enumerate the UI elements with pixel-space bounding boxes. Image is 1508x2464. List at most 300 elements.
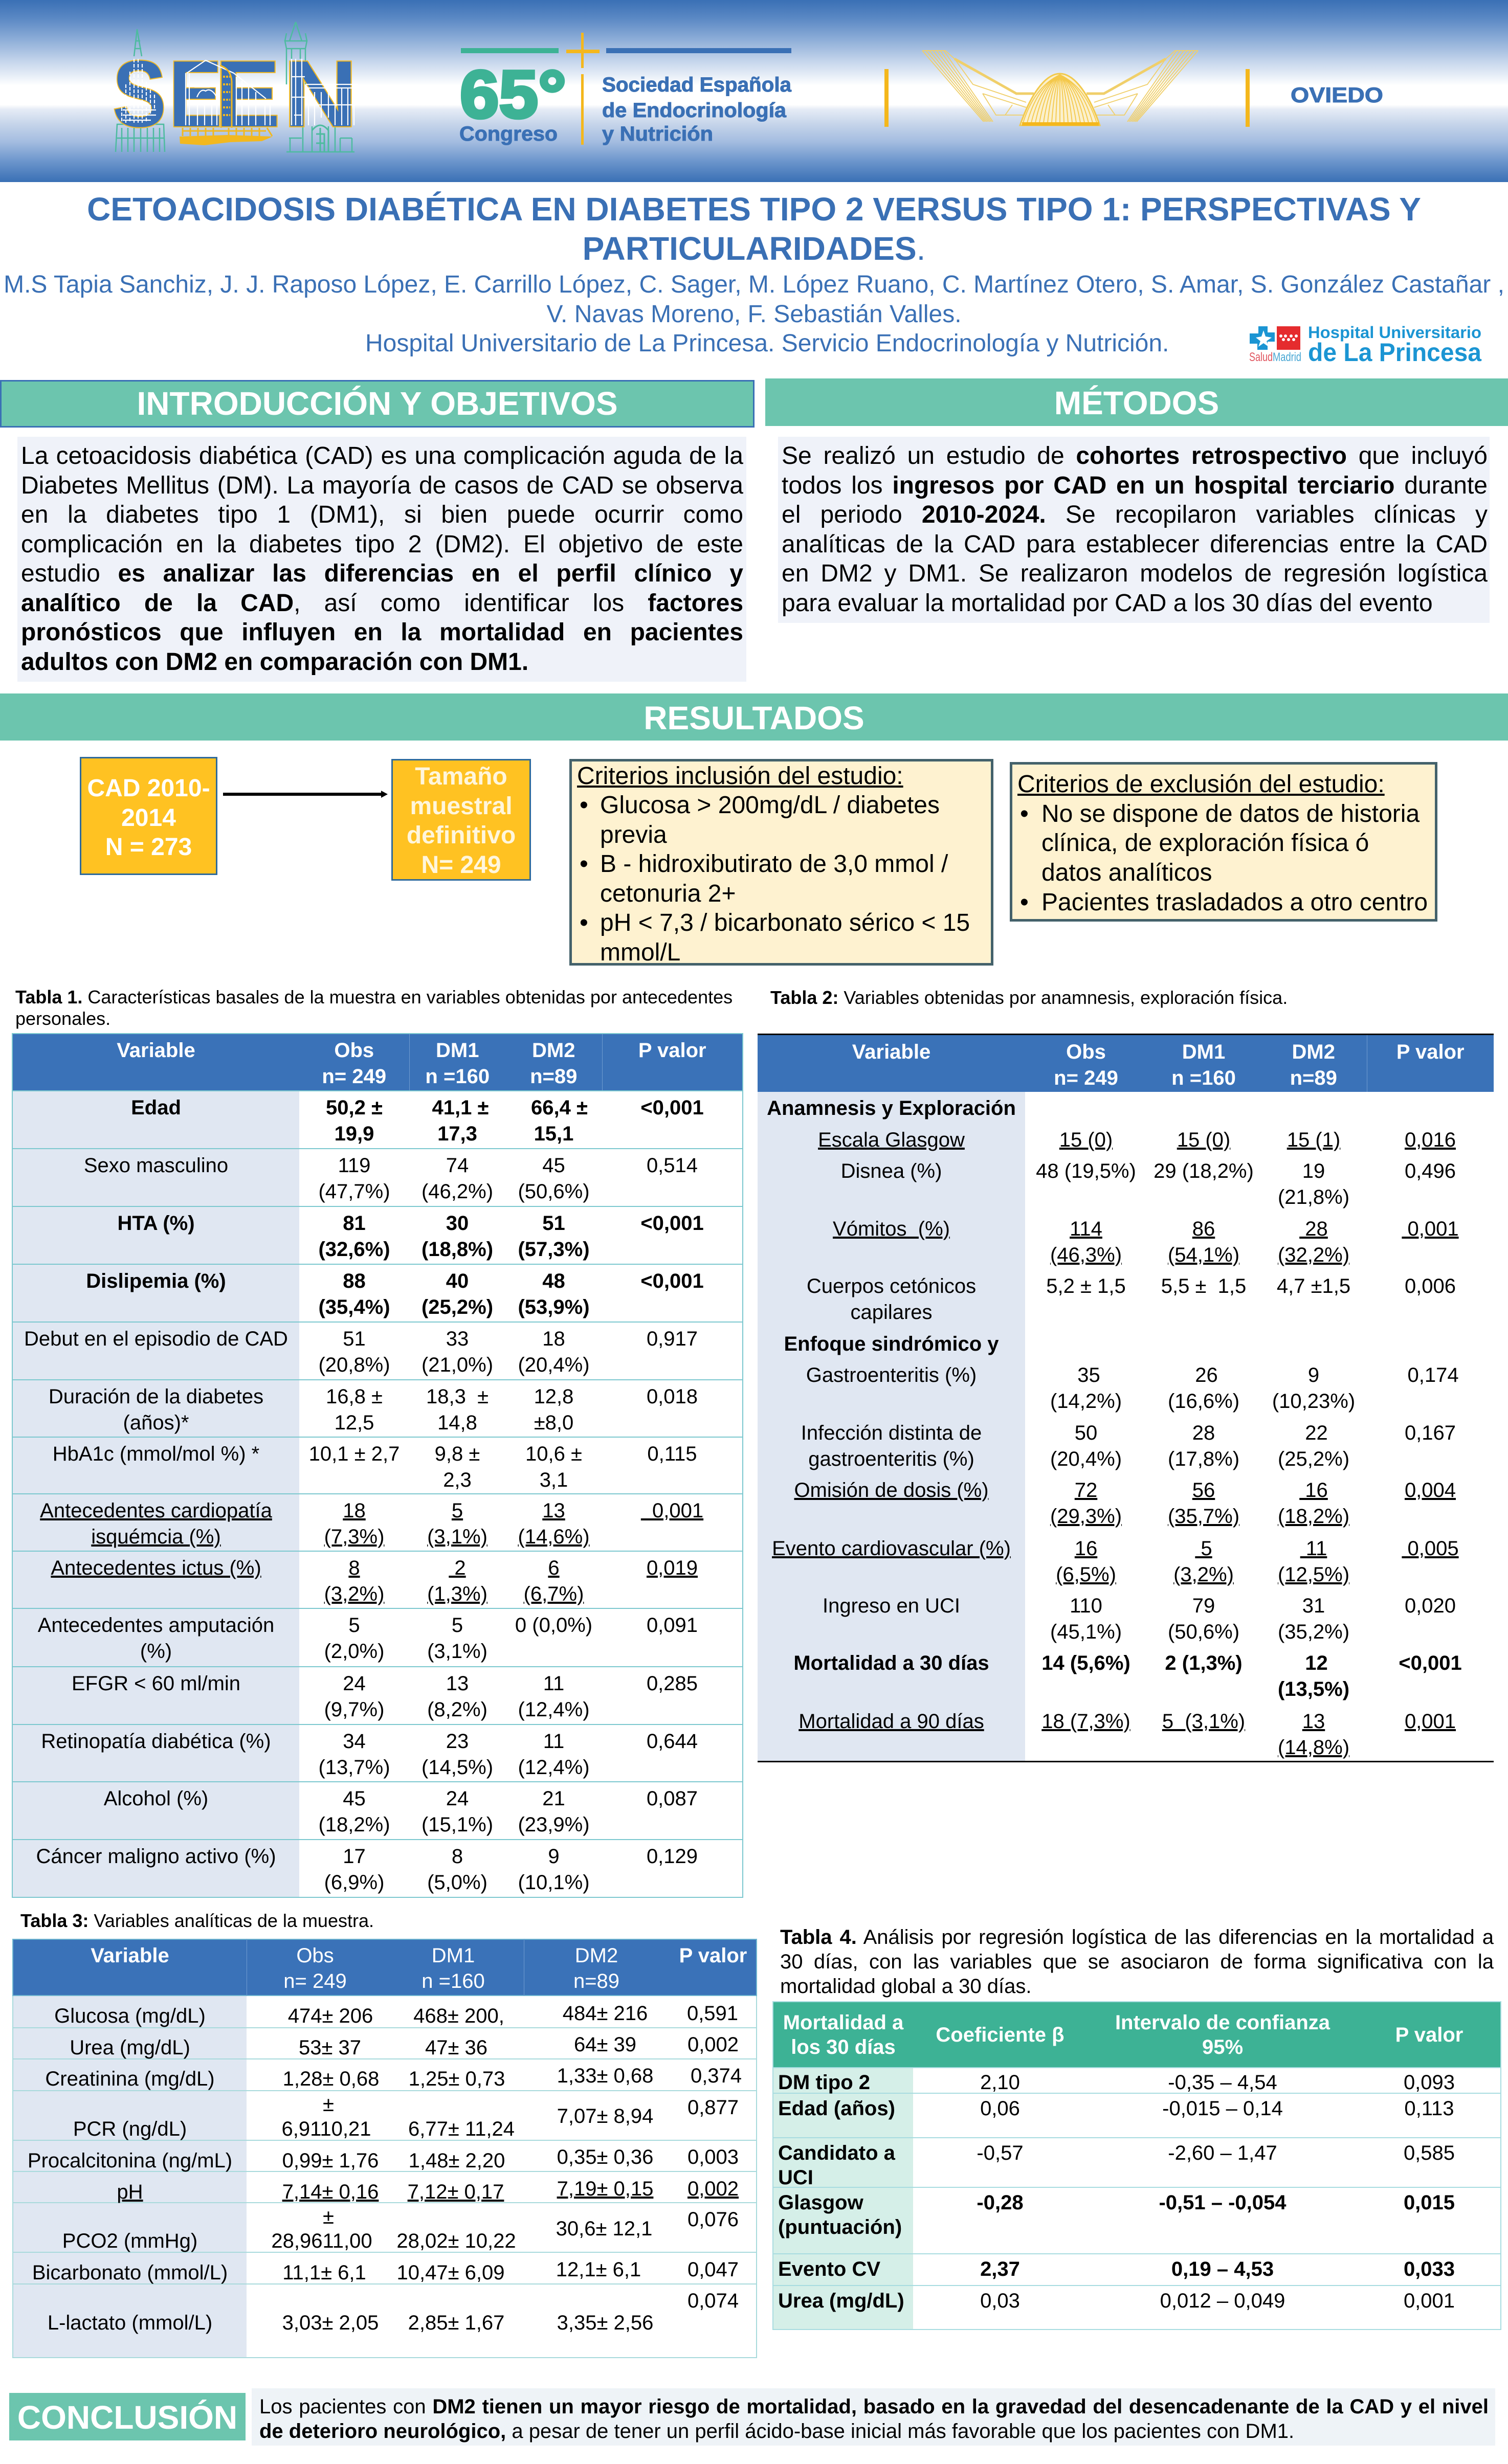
table 2: 19 [1302, 1160, 1325, 1182]
caption: tabla 4: 30 días, con las variables que se asociaron de forma significativa con la [780, 1951, 1494, 1973]
panel: introducción text: pronósticos que influyen en la mortalidad en pacientes [21, 619, 743, 646]
table 4: los 30 días [791, 2035, 896, 2058]
table 1: 5 [452, 1614, 463, 1637]
table 1: 88 [343, 1270, 366, 1292]
table 1: 11 [543, 1730, 564, 1753]
logo: Oviedo monument [922, 51, 1198, 126]
exclusion list [1020, 800, 1428, 916]
table 3: 0,35± 0,36 [557, 2146, 653, 2168]
table 1: 34 [343, 1730, 366, 1753]
table 1: 45 [343, 1787, 366, 1810]
table 2: 4,7 ±1,5 [1277, 1274, 1350, 1297]
table 3: ± [323, 2093, 334, 2116]
table 1: 16,8 ± [326, 1385, 383, 1408]
table 3: 7,12± 0,17 [408, 2181, 504, 2203]
header banner [0, 0, 1508, 182]
table 2: 31 [1302, 1595, 1325, 1617]
table 4: -0,57 [977, 2142, 1024, 2164]
table 2: (45,1%) [1050, 1620, 1122, 1643]
table 3: 1,33± 0,68 [557, 2065, 653, 2087]
table 2: 28 [1192, 1422, 1215, 1444]
table 2: 15 (1) [1287, 1128, 1340, 1151]
table 1: 30 [446, 1212, 469, 1235]
table 4: 0,06 [980, 2097, 1020, 2120]
table 2: n=89 [1290, 1067, 1337, 1089]
logo: Hospital de La Princesa: Salud [1249, 350, 1273, 364]
inclusion list: Glucosa > 200mg/dL / diabetes [600, 792, 940, 819]
table 2: 5,2 ± 1,5 [1046, 1274, 1126, 1297]
table 1: 0,091 [647, 1614, 698, 1637]
table 4: 0,03 [980, 2290, 1020, 2312]
exclusion list: • [1020, 800, 1029, 827]
inclusion list: • [580, 792, 588, 819]
table 2: 26 [1195, 1363, 1218, 1386]
caption: tabla 1: Tabla 1. Características basales de la muestra en variables obtenidas por antecedentes [15, 987, 733, 1007]
table 2: 50 [1075, 1422, 1097, 1444]
table 1: (3,1%) [427, 1640, 487, 1663]
table 3: 47± 36 [425, 2036, 487, 2059]
table 2: 0,167 [1405, 1422, 1456, 1444]
caption: tabla 4: Tabla 4. Análisis por regresión logística de las diferencias en la mortalidad a [780, 1926, 1494, 1948]
panel: métodos text: analíticas de la CAD para establecer diferencias entre la CAD [782, 531, 1488, 557]
table 1: EFGR < 60 ml/min [72, 1672, 240, 1695]
table 1: (%) [140, 1640, 172, 1663]
table 1: HbA1c (mmol/mol %) * [53, 1443, 259, 1465]
inclusion list: • [580, 909, 588, 936]
table 1: 40 [446, 1270, 469, 1292]
table 4: Mortalidad a [783, 2011, 903, 2033]
logo: 65 congreso: Congreso [459, 123, 558, 145]
table 1: 5 [348, 1614, 360, 1637]
authors [4, 271, 1504, 328]
table 1: DM2 [532, 1039, 575, 1062]
table 1: 0,285 [647, 1672, 698, 1695]
table 1: n =160 [425, 1065, 490, 1088]
caption: tabla 3: Tabla 3: Variables analíticas de la muestra. [20, 1910, 374, 1931]
table 1: 0,115 [647, 1443, 697, 1465]
table 4: 0,015 [1404, 2191, 1455, 2214]
table 1: DM1 [436, 1039, 479, 1062]
table 1: 81 [343, 1212, 366, 1235]
table 1: 3,1 [540, 1469, 568, 1491]
panel: métodos text: para evaluar la mortalidad por CAD a los 30 días del evento [782, 589, 1433, 617]
table 3: Creatinina (mg/dL) [45, 2068, 215, 2090]
table 2: Cuerpos cetónicos [807, 1274, 976, 1297]
table 1: 18,3 ± [426, 1385, 489, 1408]
table 4: 0,113 [1404, 2097, 1454, 2120]
table 4: Evento CV [778, 2258, 880, 2280]
table 1: (53,9%) [518, 1296, 590, 1318]
table 2: (25,2%) [1278, 1447, 1349, 1470]
table 2: n= 249 [1054, 1067, 1118, 1089]
table 3: Bicarbonato (mmol/L) [32, 2261, 228, 2284]
table 4: Intervalo de confianza [1115, 2011, 1330, 2033]
table 1: Cáncer maligno activo (%) [36, 1845, 276, 1868]
flow box: CAD 2010-2014: CAD 2010- [87, 775, 210, 802]
table 1: 19,9 [335, 1123, 374, 1145]
table 1: 5 [452, 1499, 463, 1522]
arrow: flow to final sample [223, 791, 388, 798]
table 2: Disnea (%) [841, 1160, 942, 1182]
logo: Oviedo text: OVIEDO [1291, 83, 1383, 107]
table 1: 0,019 [647, 1557, 698, 1579]
table 2: 5 (3,1%) [1162, 1710, 1245, 1733]
table 3: n=89 [573, 1970, 619, 1992]
panel: métodos text: Se realizó un estudio de cohortes retrospectivo que incluyó [782, 442, 1488, 469]
table 1: 41,1 ± [432, 1096, 489, 1119]
table 2: Ingreso en UCI [823, 1595, 960, 1617]
table 2: Gastroenteritis (%) [806, 1363, 977, 1386]
table 1: 18 [343, 1499, 366, 1522]
panel: métodos text: todos los ingresos por CAD en un hospital terciario durante [782, 472, 1488, 499]
table 1: 0 (0,0%) [515, 1614, 592, 1637]
table 1: 0,087 [647, 1787, 698, 1810]
table 1: (25,2%) [422, 1296, 493, 1318]
table 2: 2 (1,3%) [1165, 1652, 1243, 1674]
table 2 [758, 1034, 1494, 1762]
table 1: 12,5 [335, 1412, 374, 1434]
table 3: 3,35± 2,56 [557, 2312, 653, 2334]
table 3: PCR (ng/dL) [73, 2118, 187, 2140]
table 4: 0,012 – 0,049 [1160, 2290, 1285, 2312]
table 1: P valor [638, 1039, 706, 1062]
separator bars [884, 69, 1250, 127]
table 2: 35 [1077, 1363, 1100, 1386]
table 2: Escala Glasgow [818, 1128, 965, 1151]
table 1: 9 [548, 1845, 560, 1868]
panel: introducción text: La cetoacidosis diabética (CAD) es una complicación aguda de la [21, 442, 743, 469]
flow box: CAD 2010-2014: N = 273 [105, 834, 192, 861]
table 1: (10,1%) [518, 1871, 590, 1894]
table 2: 0,016 [1405, 1128, 1456, 1151]
table 4: -0,35 – 4,54 [1168, 2071, 1277, 2094]
table 1: 6 [548, 1557, 560, 1579]
logo: 65 congreso: 65° [460, 57, 566, 132]
table 2: Variable [852, 1041, 930, 1063]
table 1: (14,5%) [422, 1756, 493, 1779]
table 1: 23 [446, 1730, 469, 1753]
table 3: 30,6± 12,1 [556, 2217, 652, 2240]
table 1: Debut en el episodio de CAD [24, 1328, 288, 1350]
table 2: 5,5 ± 1,5 [1161, 1274, 1246, 1297]
heading: introducción y objetivos: INTRODUCCIÓN Y OBJETIVOS [137, 385, 618, 422]
table 3: n= 249 [283, 1970, 347, 1992]
table 3: 0,591 [687, 2002, 738, 2025]
table 2: Mortalidad a 30 días [793, 1652, 989, 1674]
table 2: 16 [1075, 1537, 1097, 1560]
table 2: 0,001 [1408, 1217, 1459, 1240]
table 4: -0,28 [977, 2191, 1024, 2214]
table 1: (8,2%) [427, 1698, 487, 1721]
table 4: -0,51 – -0,054 [1159, 2191, 1287, 2214]
table 1: 17 [343, 1845, 366, 1868]
table 2: 86 [1192, 1217, 1215, 1240]
table 1 [12, 1033, 743, 1898]
exclusion list: No se dispone de datos de historia [1041, 800, 1420, 827]
table 1: (6,7%) [524, 1583, 584, 1605]
table 1: Dislipemia (%) [86, 1270, 226, 1292]
table 1: (12,4%) [518, 1756, 590, 1779]
table 2: 72 [1075, 1479, 1097, 1502]
table 1: 48 [542, 1270, 565, 1292]
table 1: 13 [446, 1672, 469, 1695]
table 3: Procalcitonina (ng/mL) [28, 2149, 232, 2172]
table 1: 50,2 ± [326, 1096, 383, 1119]
table 2: Enfoque sindrómico y [784, 1333, 999, 1355]
logo: SEEN: E [169, 41, 222, 146]
table 1: 0,129 [647, 1845, 698, 1868]
table 2: 13 [1302, 1710, 1325, 1733]
panel: introducción text [17, 437, 746, 682]
table 4: Coeficiente β [936, 2023, 1065, 2046]
table 1: (23,9%) [518, 1813, 590, 1836]
table 1: 21 [542, 1787, 565, 1810]
panel: introducción text: complicación en la diabetes tipo 2 (DM2). El objetivo de este [21, 531, 743, 557]
table 1: n=89 [530, 1065, 577, 1088]
heading: métodos [765, 378, 1508, 426]
table 3: 0,374 [691, 2065, 742, 2087]
table 1: 15,1 [534, 1123, 573, 1145]
table 4: Edad (años) [778, 2097, 895, 2120]
table 1: 33 [446, 1328, 469, 1350]
table 1: Sexo masculino [84, 1154, 228, 1177]
table 4: 0,19 – 4,53 [1171, 2258, 1274, 2280]
table 2: 28 [1305, 1217, 1328, 1240]
inclusion list: • [580, 850, 588, 878]
panel: criterios de inclusión [569, 759, 993, 966]
panel: introducción text: analítico de la CAD, así como identificar los factores [21, 589, 743, 617]
table 1: 17,3 [437, 1123, 477, 1145]
table 1: (años)* [123, 1412, 189, 1434]
panel: métodos text: el periodo 2010-2024. Se recopilaron variables clínicas y [782, 501, 1488, 528]
heading: métodos: MÉTODOS [1054, 385, 1219, 421]
panel: introducción text: en la diabetes tipo 1 (DM1), si bien puede ocurrir como [21, 501, 743, 528]
authors: M.S Tapia Sanchiz, J. J. Raposo López, E. Carrillo López, C. Sager, M. López Ruano, C. Martínez Otero, S. Amar, S. González Castañar , [4, 271, 1504, 298]
table 4: 2,10 [980, 2071, 1020, 2094]
flow box: tamaño muestral: Tamaño [415, 763, 507, 790]
table 1: 8 [452, 1845, 463, 1868]
table 3: Urea (mg/dL) [70, 2036, 190, 2059]
table 3 [12, 1939, 757, 2358]
table 2: 9 [1308, 1363, 1319, 1386]
table 1: Alcohol (%) [104, 1787, 208, 1810]
table 1: (3,1%) [427, 1526, 487, 1548]
table 3: 0,877 [688, 2096, 739, 2119]
table 2: 15 (0) [1177, 1128, 1230, 1151]
table 1: isquémcia (%) [91, 1526, 221, 1548]
title: PARTICULARIDADES. [583, 230, 925, 267]
table 1: (5,0%) [427, 1871, 487, 1894]
inclusion heading: Criterios inclusión del estudio: [577, 763, 903, 790]
affiliation: Hospital Universitario de La Princesa. Servicio Endocrinología y Nutrición. [365, 330, 1169, 357]
panel: métodos text [778, 437, 1490, 623]
exclusion list: datos analíticos [1041, 859, 1212, 886]
table 1: Antecedentes amputación [38, 1614, 274, 1637]
table 1: 2 [454, 1557, 466, 1579]
table 1: Obs [334, 1039, 374, 1062]
table 1: (18,8%) [422, 1238, 493, 1261]
table 4 [772, 2001, 1501, 2330]
table 4: 0,093 [1404, 2071, 1455, 2094]
table 2: 22 [1305, 1422, 1328, 1444]
table 1: 74 [446, 1154, 469, 1177]
table 1: <0,001 [640, 1212, 704, 1235]
table 2: 14 (5,6%) [1041, 1652, 1130, 1674]
panel: introducción text: estudio es analizar las diferencias en el perfil clínico y [21, 560, 743, 587]
table 1: (57,3%) [518, 1238, 590, 1261]
table 3: DM1 [432, 1944, 475, 1967]
inclusion list: mmol/L [600, 939, 680, 966]
exclusion heading: Criterios de exclusión del estudio: [1017, 771, 1385, 798]
table 1: Antecedentes ictus (%) [51, 1557, 261, 1579]
table 1: 12,8 [534, 1385, 573, 1408]
table 3: 474± 206 [288, 2005, 373, 2027]
table 2: (54,1%) [1168, 1244, 1239, 1266]
table 1: ±8,0 [534, 1412, 573, 1434]
table 1: (50,6%) [518, 1180, 590, 1203]
table 3: 28,9611,00 [271, 2230, 372, 2252]
table 2: 18 (7,3%) [1041, 1710, 1130, 1733]
table 2: Obs [1066, 1041, 1106, 1063]
table 2: 56 [1192, 1479, 1215, 1502]
table 1: (9,7%) [324, 1698, 384, 1721]
table 3: Glucosa (mg/dL) [54, 2005, 206, 2027]
table 2: 110 [1070, 1595, 1102, 1617]
logo: SEEN: E [215, 41, 280, 146]
table 4: -0,015 – 0,14 [1162, 2097, 1283, 2120]
table 2: P valor [1396, 1041, 1465, 1063]
table 1: (15,1%) [422, 1813, 493, 1836]
logo: 65 congreso [459, 33, 792, 145]
caption: tabla 1 [15, 987, 733, 1029]
table 1: (13,7%) [318, 1756, 390, 1779]
table 1: 8 [348, 1557, 360, 1579]
table 1: (32,6%) [318, 1238, 390, 1261]
table 2: Mortalidad a 90 días [799, 1710, 984, 1733]
table 2: 0,020 [1405, 1595, 1456, 1617]
table 2: DM1 [1182, 1041, 1225, 1063]
table 2: 16 [1305, 1479, 1328, 1502]
table 2: (16,6%) [1168, 1390, 1239, 1413]
table 3: 11,1± 6,1 [282, 2261, 366, 2284]
table 1: Duración de la diabetes [49, 1385, 263, 1408]
table 3: 28,02± 10,22 [396, 2230, 516, 2252]
logo: SEEN [113, 22, 358, 152]
table 1: Variable [117, 1039, 195, 1062]
inclusion list: cetonuria 2+ [600, 880, 736, 907]
table 1: (7,3%) [324, 1526, 384, 1548]
table 2: (14,8%) [1278, 1736, 1349, 1758]
table 1: Edad [131, 1096, 181, 1119]
table 3: 7,19± 0,15 [557, 2178, 653, 2200]
table 1: 51 [542, 1212, 565, 1235]
table 1: (2,0%) [324, 1640, 384, 1663]
table 4: 0,033 [1404, 2258, 1455, 2280]
table 1: 10,1 ± 2,7 [309, 1443, 400, 1465]
table 1: 51 [343, 1328, 366, 1350]
table 2: 5 [1201, 1537, 1212, 1560]
table 3: 10,47± 6,09 [396, 2261, 505, 2284]
table 4: 0,585 [1404, 2142, 1455, 2164]
table 3: 484± 216 [563, 2002, 648, 2025]
table 1: (46,2%) [422, 1180, 493, 1203]
panel: introducción text: Diabetes Mellitus (DM). La mayoría de casos de CAD se observa [21, 472, 743, 499]
table 2: (32,2%) [1278, 1244, 1349, 1266]
table 2: 15 (0) [1059, 1128, 1113, 1151]
table 4: UCI [778, 2166, 813, 2189]
logo: 65 congreso: Sociedad Española [602, 74, 792, 96]
table 2: n =160 [1171, 1067, 1236, 1089]
table 2: <0,001 [1399, 1652, 1462, 1674]
table 1: Retinopatía diabética (%) [41, 1730, 271, 1753]
table 2: (46,3%) [1050, 1244, 1122, 1266]
title: CETOACIDOSIS DIABÉTICA EN DIABETES TIPO 2 VERSUS TIPO 1: PERSPECTIVAS Y [87, 191, 1421, 228]
table 2: (18,2%) [1278, 1505, 1349, 1527]
table 2: Evento cardiovascular (%) [772, 1537, 1011, 1560]
table 1: (18,2%) [318, 1813, 390, 1836]
table 1: 18 [542, 1328, 565, 1350]
table 3: 1,48± 2,20 [409, 2149, 505, 2172]
table 3: 53± 37 [299, 2036, 361, 2059]
table 1: 0,917 [647, 1328, 698, 1350]
table 2: (6,5%) [1056, 1563, 1116, 1585]
table 3: 468± 200, [413, 2005, 504, 2027]
table 1: (1,3%) [427, 1583, 487, 1605]
table 2: (35,2%) [1278, 1620, 1349, 1643]
logo: SEEN: S [113, 41, 166, 146]
table 3: 1,25± 0,73 [409, 2068, 505, 2090]
table 2: 11 [1306, 1537, 1327, 1560]
table 4: -2,60 – 1,47 [1168, 2142, 1277, 2164]
flow box: tamaño muestral [391, 759, 531, 881]
table 2: Omisión de dosis (%) [794, 1479, 989, 1502]
panel: conclusión text: Los pacientes con DM2 tienen un mayor riesgo de mortalidad, basado en la gravedad del desencadenante de la CAD y el nivel [259, 2395, 1489, 2418]
table 2: (29,3%) [1050, 1505, 1122, 1527]
table 2: Vómitos (%) [833, 1217, 950, 1240]
table 1: 0,001 [652, 1499, 703, 1522]
table 2: (20,4%) [1050, 1447, 1122, 1470]
table 1: <0,001 [640, 1270, 704, 1292]
table 2: 0,006 [1405, 1274, 1456, 1297]
table 1: (3,2%) [324, 1583, 384, 1605]
heading: resultados [0, 693, 1508, 741]
inclusion list [580, 792, 970, 966]
table 4: 2,37 [980, 2258, 1020, 2280]
table 3: 0,002 [688, 2178, 739, 2200]
table 2: Infección distinta de [801, 1422, 982, 1444]
caption: tabla 1: personales. [15, 1008, 110, 1029]
table 1: (47,7%) [318, 1180, 390, 1203]
table 2: 0,174 [1408, 1363, 1459, 1386]
caption: tabla 4 [780, 1926, 1494, 1998]
table 1: 2,3 [443, 1469, 472, 1491]
table 1: (20,4%) [518, 1354, 590, 1376]
heading: conclusión: CONCLUSIÓN [17, 2399, 237, 2436]
table 3: n =160 [422, 1970, 485, 1992]
inclusion list: B - hidroxibutirato de 3,0 mmol / [600, 850, 948, 878]
table 3: P valor [679, 1944, 747, 1967]
table 2: capilares [850, 1301, 933, 1324]
logo: SEEN: N [283, 41, 358, 146]
panel: conclusión text: de deterioro neurológico, a pesar de tener un perfil ácido-base inicial más favorable que los pacientes con DM1. [259, 2420, 1294, 2443]
authors: V. Navas Moreno, F. Sebastián Valles. [546, 301, 962, 328]
caption: tabla 4: mortalidad global a 30 días. [780, 1975, 1031, 1998]
table 2: (50,6%) [1168, 1620, 1239, 1643]
table 1: 45 [542, 1154, 565, 1177]
table 3: PCO2 (mmHg) [62, 2230, 197, 2252]
table 1: (12,4%) [518, 1698, 590, 1721]
panel: conclusión text [252, 2388, 1495, 2446]
